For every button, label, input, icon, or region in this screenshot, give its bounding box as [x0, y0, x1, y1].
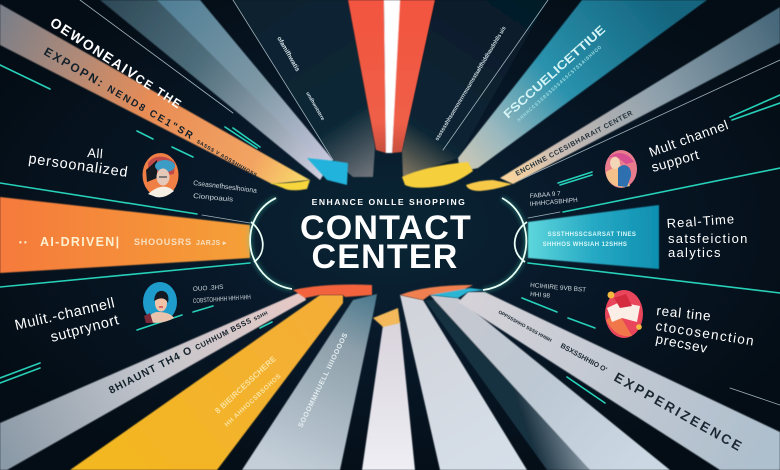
left block: All personalized: All	[87, 145, 104, 161]
top-right dark panel text: ssssssshhsomnnnrrrrmuumsstaaftfhiddhaudnhlls uis	[435, 25, 508, 142]
right small note upper: IHHHCASBHIPH	[530, 197, 578, 208]
bottom-left gray band text: 8HIAUNT TH4 O CUHHUM BSSS SSHH	[107, 306, 270, 397]
bottom yellow band	[70, 295, 343, 470]
icon: avatar woman on blue	[143, 282, 177, 323]
orange band text: SHOOUSRS	[134, 237, 192, 247]
top-left orange band	[0, 4, 310, 184]
top-right gray band	[500, 7, 780, 184]
bottom yellow band text: 8 BIEIRCESSCHERE	[213, 354, 278, 415]
left block: All personalized: persoonalized	[27, 151, 129, 181]
bottom-right band 1	[400, 295, 527, 470]
top-left slate band	[100, 0, 333, 180]
icon: avatar couple	[605, 150, 637, 188]
right small note upper	[530, 190, 578, 208]
bottom yellow band text: HH AHHOCSBSOHOS	[224, 372, 283, 428]
icon: avatar woman with orange headscarf	[142, 153, 178, 197]
right block: real time processing: real tine	[656, 303, 712, 324]
right small note upper: FABAA 9 7	[530, 190, 561, 200]
right block: real-time satisfaction analytics: aalytics	[668, 245, 722, 260]
right block: Multi channel support: support	[650, 147, 701, 175]
right block: real-time satisfaction analytics: Real-Time	[666, 211, 736, 231]
right block: real time processing	[654, 303, 756, 356]
top-left dark panel text: undhwntstrre	[304, 91, 326, 122]
cyan band text	[543, 232, 636, 248]
left block: Multi-channel support: sutprynort	[49, 312, 121, 346]
top-right cyan band title: FSCCUELICETTIUE	[501, 23, 608, 121]
bottom-right band 3	[458, 292, 780, 470]
bottom blue-gray band	[242, 294, 377, 470]
top-right gray band text: ENCHINE CCESIBHARAIT CENTER	[515, 110, 634, 178]
right block: Multi channel support: Mult channel	[647, 117, 731, 160]
bottom-right gray band text: OPPSSSHHO SSSS HHIIIH	[497, 310, 553, 344]
cyan band: real-time analytics	[528, 205, 659, 269]
bottom-right band 2	[425, 295, 670, 470]
left block: Multi-channel support: Mulit.-channell	[13, 295, 117, 334]
left small note lower: COBSTOHHHH HHH HHH	[193, 294, 251, 305]
orange band text: JARJS ▸	[196, 240, 227, 247]
top-left dark panel text	[275, 36, 326, 122]
top-right cyan band	[458, 0, 707, 172]
glowing caps	[270, 158, 512, 327]
cyan band text: SHHHOS WHSIAH 12SHHS	[543, 242, 627, 248]
top-left dark panel	[233, 0, 375, 177]
bottom blue-gray band text: SOOOMMHUELL IIIIOOOOS	[298, 332, 350, 429]
bottom-left gray band	[0, 291, 306, 470]
left small note	[193, 180, 257, 204]
headline line one: CONTACT	[300, 209, 472, 247]
title	[300, 197, 472, 276]
icon: red circle handshake	[605, 290, 643, 338]
right small note lower: HCIHIIRE 9VB BST	[530, 282, 586, 294]
cyan band text: SSSTHHSSCSARSAT TINES	[548, 232, 636, 238]
bottom-right gray band text	[497, 310, 744, 454]
right block: real-time satisfaction analytics: satsfeiction	[668, 231, 749, 246]
band text: top-left white: OEWONEAIVCE THE	[47, 14, 186, 112]
band text: top-left orange: EXPOPN: NEND8 CE1"SR SASSS V AOSSHHHOSS	[42, 44, 262, 180]
orange band text: • •	[19, 238, 27, 247]
right small note lower: HHI 98	[530, 291, 551, 300]
left small note: Cionpoauis	[193, 193, 234, 204]
left small note: Cseasnefhseslhoiona	[193, 180, 257, 195]
top-right cyan band subtitle: HHHHCCSSSRSSSSSASSCSTSSAISHHOO	[516, 44, 604, 123]
right block: real time processing: precsev	[654, 331, 709, 356]
glow ring around title	[250, 198, 527, 290]
bottom centre white band	[362, 322, 415, 470]
top-right dark panel	[402, 0, 548, 178]
headline line two: CENTER	[312, 238, 458, 276]
subtitle: ENHANCE ONLLE SHOPPING	[312, 197, 466, 207]
orange band text	[19, 235, 227, 249]
orange band text: AI-DRIVEN|	[40, 235, 120, 249]
bottom-right gray band text: EXPPERIZEENCE	[612, 370, 744, 454]
top centre red beam	[348, 0, 435, 153]
right small note lower	[530, 282, 586, 300]
bottom-right gray band text: BSXSSHHIIO O'	[559, 343, 608, 374]
right block: real-time satisfaction analytics	[666, 211, 749, 260]
top-left dark panel text: ofamifhwatis	[275, 36, 301, 73]
left small note lower	[193, 284, 251, 305]
right block: real time processing: ctocosenction	[655, 318, 756, 349]
orange band: AI-driven	[0, 197, 250, 273]
left small note lower: OUO .3HS	[193, 284, 224, 293]
